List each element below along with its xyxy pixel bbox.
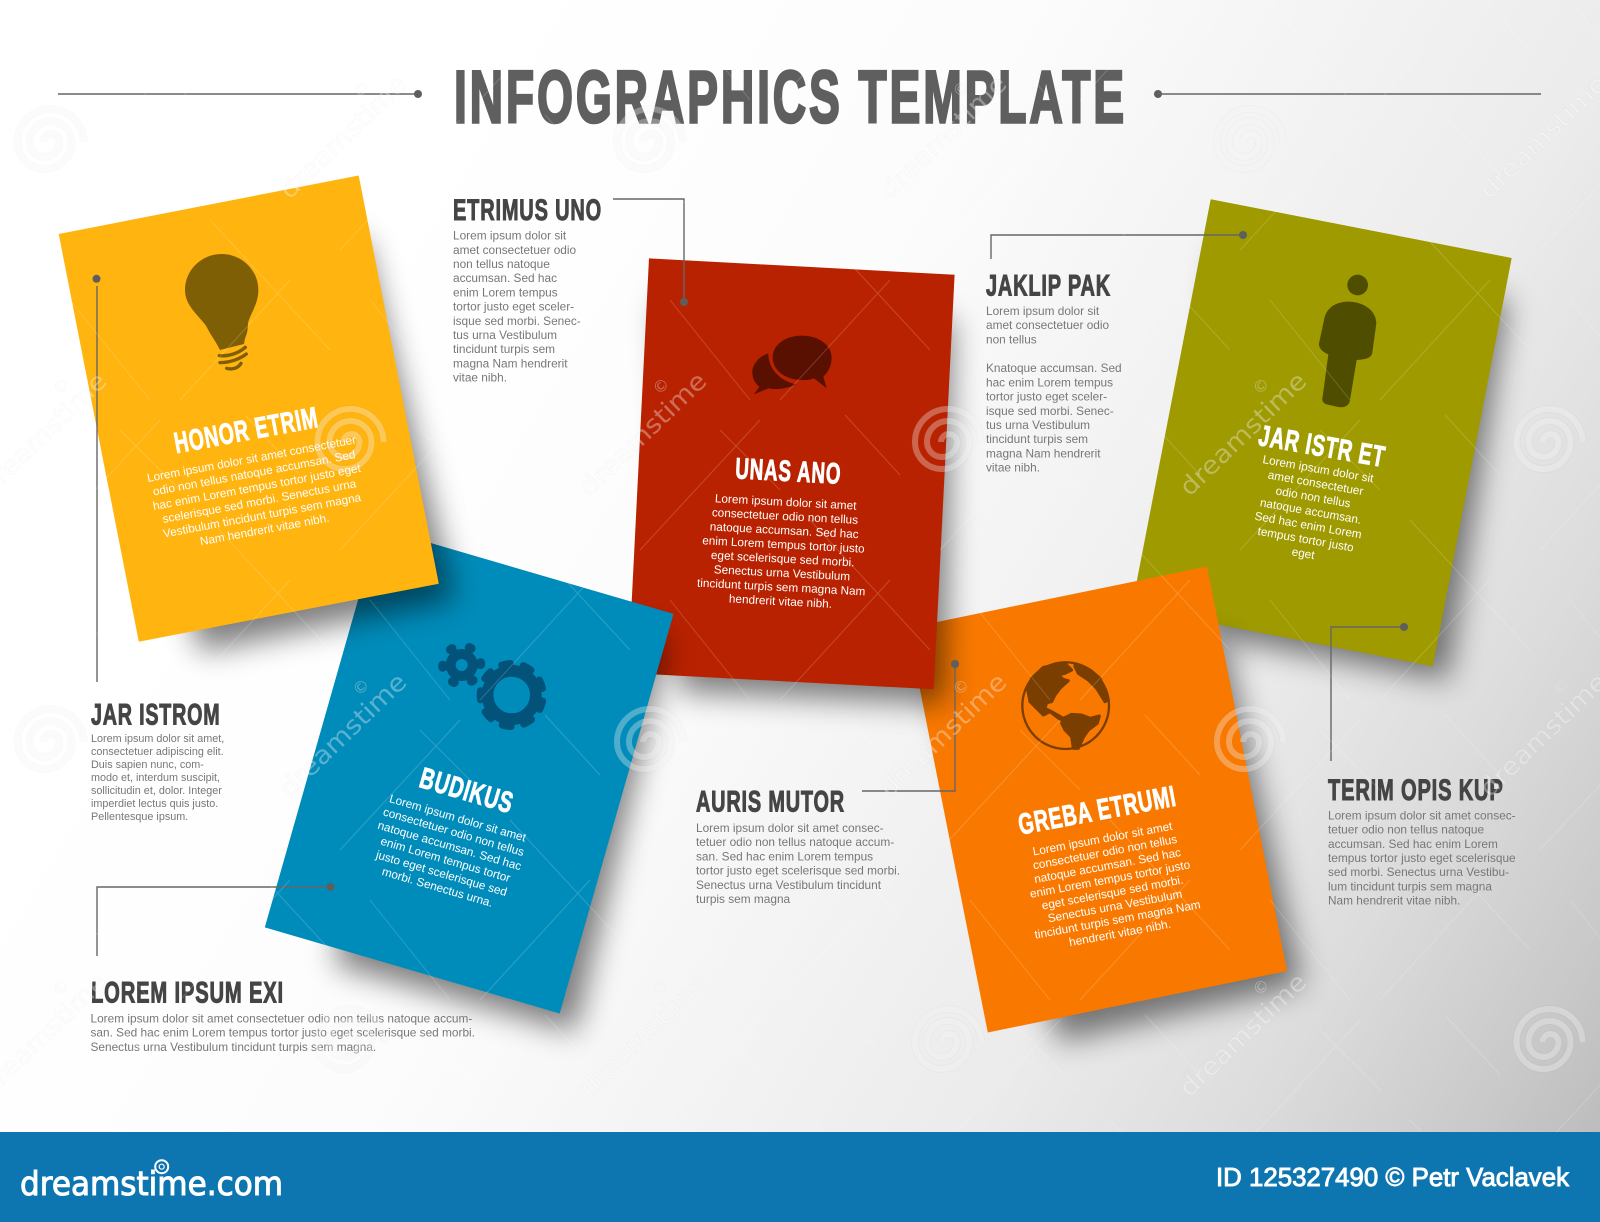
text block: LOREM IPSUM EXI: LOREM IPSUM EXI — [91, 977, 284, 1010]
card body text: Lorem ipsum dolor sit amet — [1032, 820, 1174, 858]
text block: JAKLIP PAK: tus urna Vestibulum — [986, 418, 1090, 432]
card body text: Senectus urna Vestibulum — [1047, 888, 1184, 925]
card body text: hendrerit vitae nibh. — [729, 592, 832, 611]
text block: ETRIMUS UNO: tortor justo eget sceler- — [453, 300, 574, 314]
text block: ETRIMUS UNO: magna Nam hendrerit — [453, 356, 568, 370]
text block: TERIM OPIS KUP — [1328, 774, 1516, 908]
watermark overlay: © — [1549, 77, 1573, 101]
watermark overlay: dreamstime — [1474, 69, 1600, 205]
text block: ETRIMUS UNO: non tellus natoque — [453, 257, 550, 271]
text block: JAKLIP PAK: tincidunt turpis sem — [986, 432, 1088, 446]
text block: ETRIMUS UNO: vitae nibh. — [453, 371, 507, 385]
card body text: Lorem ipsum dolor sit amet consectetuer — [146, 433, 357, 485]
text block: ETRIMUS UNO: enim Lorem tempus — [453, 285, 558, 299]
watermark overlay: dreamstime — [574, 967, 713, 1103]
text block: TERIM OPIS KUP: Nam hendrerit vitae nibh. — [1328, 894, 1460, 908]
watermark overlay: © — [349, 675, 373, 699]
text block: AURIS MUTOR: AURIS MUTOR — [696, 786, 845, 819]
title: INFOGRAPHICS TEMPLATE — [454, 56, 1127, 138]
watermark overlay: © — [49, 975, 73, 999]
text block: ETRIMUS UNO: ETRIMUS UNO — [453, 194, 602, 227]
card body text: hac enim Lorem tempus tortor justo eget — [152, 462, 362, 513]
card body text: tempus tortor justo — [1257, 525, 1355, 555]
connector: olive card to TERIM OPIS KUP — [1331, 623, 1408, 761]
card body text: consectetuer odio non tellus — [1032, 833, 1178, 872]
text block: TERIM OPIS KUP: tempus tortor justo eget scelerisque — [1328, 851, 1516, 865]
panel: yellow card — [59, 176, 455, 652]
text block: AURIS MUTOR: tetuer odio non tellus natoque accum- — [696, 835, 894, 849]
connector: yellow card to JAR ISTROM — [92, 275, 100, 682]
text block: AURIS MUTOR: tortor justo eget scelerisque sed morbi. — [696, 864, 900, 878]
text block: TERIM OPIS KUP: tetuer odio non tellus natoque — [1328, 823, 1484, 837]
title rule left — [58, 90, 422, 98]
icon: speech bubbles — [752, 336, 832, 394]
card body text: consectetuer odio non tellus — [712, 506, 858, 527]
watermark overlay: © — [349, 77, 373, 101]
watermark overlay: dreamstime — [1174, 366, 1313, 502]
connector: blue card to LOREM IPSUM EXI — [97, 883, 335, 956]
card body text — [364, 791, 531, 915]
footer bar — [0, 1132, 1600, 1222]
card heading: JAR ISTR ET: JAR ISTR ET — [1256, 419, 1388, 474]
text block: ETRIMUS UNO: tus urna Vestibulum — [453, 328, 557, 342]
watermark overlay: dreamstime — [274, 69, 413, 205]
watermark overlay: © — [949, 77, 973, 101]
text block: JAR ISTROM: consectetuer adipiscing elit. — [91, 746, 224, 758]
title rule right — [1154, 90, 1541, 98]
icon: person — [1319, 275, 1376, 407]
connector: JAKLIP PAK to olive card — [991, 231, 1247, 259]
card body text: tincidunt turpis sem magna Nam — [697, 577, 866, 598]
card heading: BUDIKUS — [364, 754, 542, 915]
connector: ETRIMUS UNO to red card — [613, 199, 688, 306]
watermark overlay: dreamstime — [874, 69, 1013, 205]
text block: JAR ISTROM: Duis sapien nunc, com- — [91, 759, 204, 771]
card body text — [1247, 453, 1375, 570]
text block: ETRIMUS UNO: isque sed morbi. Senec- — [453, 314, 581, 328]
watermark overlay: © — [1249, 975, 1273, 999]
text block: TERIM OPIS KUP: Lorem ipsum dolor sit amet consec- — [1328, 808, 1516, 822]
text block: JAKLIP PAK: Lorem ipsum dolor sit — [986, 304, 1100, 318]
text block: AURIS MUTOR: Lorem ipsum dolor sit amet consec- — [696, 821, 884, 835]
card body text — [146, 433, 370, 556]
panel: blue card — [265, 528, 674, 1032]
text block: JAKLIP PAK: amet consectetuer odio — [986, 318, 1110, 332]
watermark overlay: © — [649, 975, 673, 999]
card heading: HONOR ETRIM — [139, 395, 370, 556]
text block: AURIS MUTOR: san. Sed hac enim Lorem tempus — [696, 849, 873, 863]
text block: LOREM IPSUM EXI: Lorem ipsum dolor sit amet consectetuer odio non tellus natoque accum- — [90, 1012, 472, 1026]
card body text: enim Lorem tempus tortor justo — [702, 534, 865, 556]
card body text: odio non tellus — [1275, 484, 1352, 510]
text block: TERIM OPIS KUP: TERIM OPIS KUP — [1328, 774, 1504, 807]
card body text — [1019, 817, 1204, 955]
panel: orange card — [908, 566, 1302, 1042]
watermark overlay: © — [1549, 675, 1573, 699]
footer credit: ID 125327490 © Petr Vaclavek — [1216, 1162, 1570, 1192]
text block: JAKLIP PAK: JAKLIP PAK — [986, 270, 1111, 303]
text block: JAKLIP PAK: isque sed morbi. Senec- — [986, 404, 1114, 418]
card body text: Nam hendrerit vitae nibh. — [199, 512, 330, 548]
text block: TERIM OPIS KUP: lum tincidunt turpis sem magna — [1328, 879, 1492, 893]
text block: AURIS MUTOR: Senectus urna Vestibulum tincidunt — [696, 878, 882, 892]
text block: JAR ISTROM: JAR ISTROM — [91, 699, 220, 732]
text block: JAR ISTROM: modo et, interdum suscipit, — [91, 772, 220, 784]
card body text: consectetuer odio non tellus — [381, 805, 526, 859]
text block: JAKLIP PAK: magna Nam hendrerit — [986, 446, 1101, 460]
text block: ETRIMUS UNO: Lorem ipsum dolor sit — [453, 229, 567, 243]
card body text — [696, 492, 870, 613]
watermark overlay: dreamstime — [874, 667, 1013, 803]
watermark overlay: dreamstime — [1174, 967, 1313, 1103]
card body text: eget — [1291, 545, 1316, 562]
text block: AURIS MUTOR — [696, 786, 900, 906]
icon: globe — [1022, 662, 1109, 749]
card body text: natoque accumsan. Sed hac — [1033, 846, 1182, 886]
text block: JAR ISTROM — [91, 699, 224, 823]
card body text: Sed hac enim Lorem — [1254, 510, 1363, 541]
card body text: Lorem ipsum dolor sit — [1262, 453, 1375, 486]
text block: JAR ISTROM: Lorem ipsum dolor sit amet, — [91, 733, 224, 745]
card body text: tincidunt turpis sem magna Nam — [1034, 898, 1202, 942]
card body text: odio non tellus natoque accumsan. Sed — [152, 448, 357, 498]
card heading: JAR ISTR ET — [1239, 419, 1388, 571]
card body text: Senectus urna Vestibulum — [713, 563, 851, 583]
card body text: eget scelerisque sed morbi. — [1041, 874, 1184, 913]
text block: JAKLIP PAK: vitae nibh. — [986, 461, 1040, 475]
text block: ETRIMUS UNO: tincidunt turpis sem — [453, 342, 555, 356]
card body text: hendrerit vitae nibh. — [1068, 918, 1172, 949]
card body text: enim Lorem tempus tortor justo — [1029, 858, 1192, 901]
text block: JAKLIP PAK: hac enim Lorem tempus — [986, 375, 1113, 389]
text block: JAKLIP PAK: tortor justo eget sceler- — [986, 390, 1107, 404]
card heading: GREBA ETRUMI — [1011, 779, 1204, 955]
text block: ETRIMUS UNO — [453, 194, 602, 385]
card heading: UNAS ANO: UNAS ANO — [735, 452, 842, 491]
card body text: natoque accumsan. Sed hac — [376, 819, 523, 873]
card heading: UNAS ANO — [696, 451, 872, 613]
text block: JAR ISTROM: imperdiet lectus quis justo. — [91, 798, 218, 810]
watermark overlay: © — [49, 374, 73, 398]
watermark overlay: © — [949, 675, 973, 699]
connector: orange card to AURIS MUTOR — [862, 660, 959, 791]
watermark overlay: dreamstime — [574, 366, 713, 502]
watermark overlay: © — [649, 374, 673, 398]
text block: TERIM OPIS KUP: accumsan. Sed hac enim Lorem — [1328, 837, 1498, 851]
card heading: HONOR ETRIM: HONOR ETRIM — [171, 401, 321, 460]
card body text: Vestibulum tincidunt turpis sem magna — [162, 491, 363, 541]
card body text: justo eget scelerisque sed — [373, 848, 508, 899]
text block: JAKLIP PAK — [986, 270, 1122, 475]
card body text: eget scelerisque sed morbi. — [711, 549, 855, 569]
card body text: Lorem ipsum dolor sit amet — [715, 492, 858, 513]
panel: olive card — [1132, 199, 1512, 680]
text block: ETRIMUS UNO: amet consectetuer odio — [453, 243, 577, 257]
card body text: enim Lorem tempus tortor — [379, 835, 512, 885]
text block: LOREM IPSUM EXI — [90, 977, 475, 1054]
text block: ETRIMUS UNO: accumsan. Sed hac — [453, 271, 557, 285]
card heading: BUDIKUS: BUDIKUS — [416, 762, 517, 820]
text block: JAKLIP PAK: non tellus — [986, 332, 1037, 346]
card body text: amet consectetuer — [1267, 469, 1364, 498]
watermark overlay: dreamstime — [274, 667, 413, 803]
panel: red card — [628, 258, 955, 704]
card body text: morbi. Senectus urna. — [380, 865, 494, 910]
card body text: scelerisque sed morbi. Senectus urna — [162, 477, 358, 526]
watermark overlay: dreamstime — [1474, 667, 1600, 803]
text block: LOREM IPSUM EXI: san. Sed hac enim Lorem tempus tortor justo eget scelerisque sed morbi. — [90, 1026, 475, 1040]
card body text: natoque accumsan. — [1259, 496, 1362, 527]
text block: JAR ISTROM: Pellentesque ipsum. — [91, 811, 188, 823]
card heading: GREBA ETRUMI: GREBA ETRUMI — [1016, 780, 1179, 841]
watermark overlay: © — [1249, 374, 1273, 398]
text block: AURIS MUTOR: turpis sem magna — [696, 892, 791, 906]
card body text: natoque accumsan. Sed hac — [709, 520, 859, 541]
text block: JAKLIP PAK: Knatoque accumsan. Sed — [986, 361, 1122, 375]
text block: TERIM OPIS KUP: sed morbi. Senectus urna Vestibu- — [1328, 865, 1509, 879]
footer logo: dreamstime.com — [20, 1164, 283, 1203]
card body text: Lorem ipsum dolor sit amet — [388, 792, 528, 845]
text block: JAR ISTROM: sollicitudin et, dolor. Integer — [91, 785, 222, 797]
text block: LOREM IPSUM EXI: Senectus urna Vestibulum tincidunt turpis sem magna. — [90, 1040, 376, 1054]
icon: gears — [441, 644, 549, 732]
icon: light bulb — [185, 254, 258, 369]
